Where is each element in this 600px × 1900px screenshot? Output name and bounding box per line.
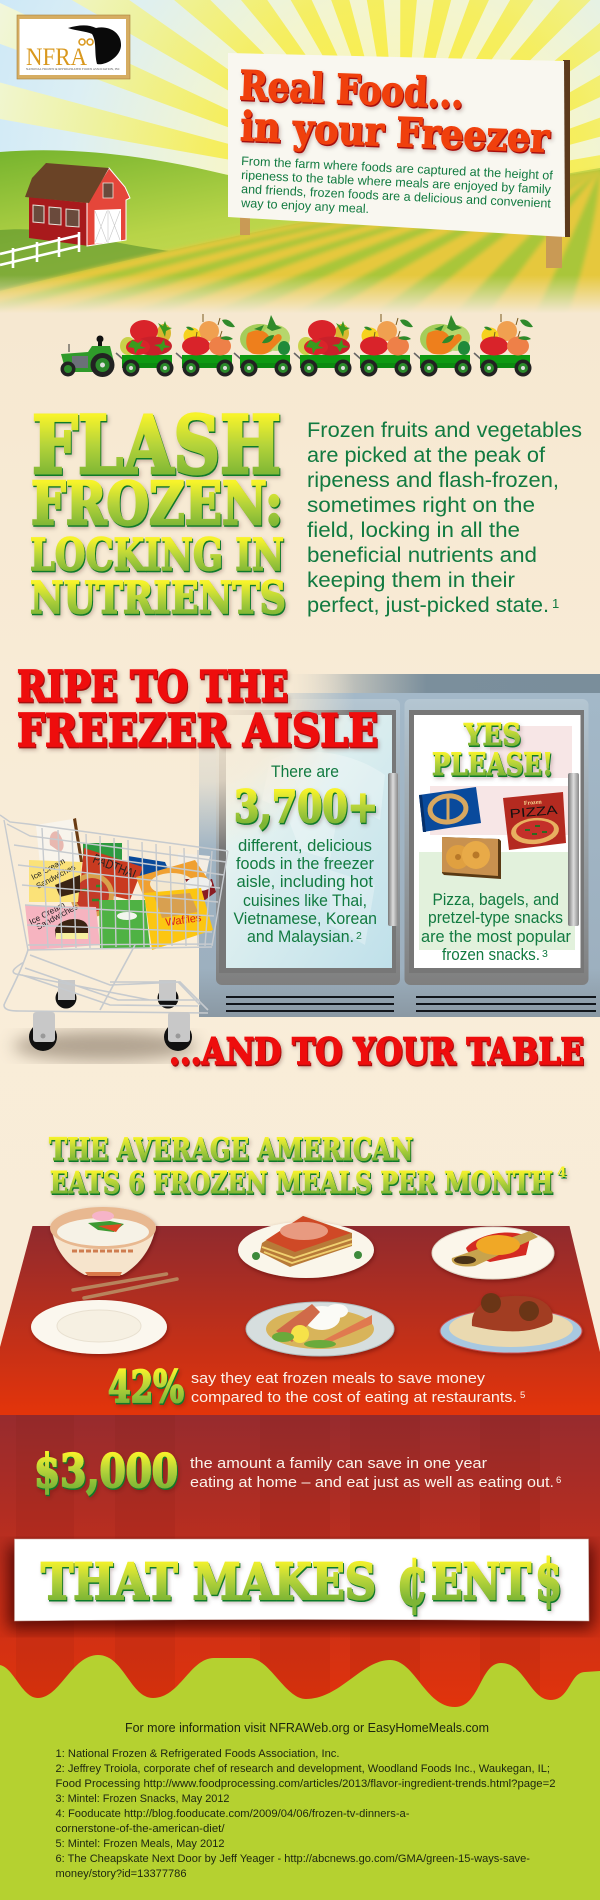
text: flash frozen explanation: perfect, just-picked state.: [307, 594, 549, 617]
text: flash frozen explanation: are picked at the peak of: [307, 444, 545, 467]
logo: [17, 15, 130, 79]
text: popular frozen snacks: frozen snacks.: [442, 946, 540, 964]
draped cloth folds: [16, 1415, 540, 1720]
text: flash frozen explanation: beneficial nutrients and: [307, 544, 537, 567]
crop field: [0, 170, 600, 307]
billboard headline: in your Freezer: [240, 103, 551, 162]
text: popular frozen snacks: Pizza, bagels, and: [432, 891, 559, 909]
green hill: [0, 150, 600, 291]
text: freezer aisle variety: cuisines like Thai,: [243, 892, 367, 910]
text: family savings: 6: [556, 1475, 561, 1486]
wagon: fruit: [354, 314, 413, 376]
heading: flash frozen: LOCKING IN: [30, 530, 284, 581]
heading: yes please: PLEASE!: [432, 747, 553, 783]
heading: ripe to the freezer aisle: [17, 662, 378, 757]
wagon: tomatoes: [294, 320, 352, 376]
freezer top band: [285, 674, 600, 693]
panel: savings background: [0, 1415, 600, 1720]
text: flash frozen explanation: Frozen fruits and vegetables: [307, 419, 582, 442]
fence: [0, 232, 80, 268]
freezer right door: [404, 699, 588, 985]
logo tagline: NATIONAL FROZEN & REFRIGERATED FOODS ASSOCIATION, INC: [26, 67, 120, 72]
banner headline: $: [535, 1547, 562, 1614]
front wheels: [29, 1012, 192, 1051]
billboard body text: From the farm where foods are captured at the height of: [241, 154, 554, 183]
stat: $3,000: $3,000: [34, 1444, 178, 1498]
text: flash frozen explanation: ripeness and flash-frozen,: [307, 469, 559, 492]
text: flash frozen explanation: 1: [552, 596, 559, 611]
banner sheet: [14, 1539, 589, 1621]
tractor: [60, 336, 114, 377]
text: references: money/story?id=13377786: [56, 1868, 186, 1880]
billboard body text: ripeness to the table where meals are enjoyed by family: [241, 168, 552, 197]
panel: freezer case: [190, 670, 600, 1017]
text: popular frozen snacks: [421, 891, 571, 964]
text: flash frozen explanation: field, locking in all the: [307, 519, 520, 542]
icon: bagel box: [442, 837, 501, 879]
barn: [25, 163, 130, 246]
wagon: fruit: [176, 314, 235, 376]
banner: that makes cents: [8, 1539, 594, 1629]
heading: average american frozen meals: [49, 1132, 567, 1201]
frozen foods in cart: Ice Cream: [27, 900, 67, 927]
plate: empty: [31, 1300, 167, 1354]
text: freezer aisle variety: and Malaysian.: [247, 928, 354, 946]
faded world map: [262, 752, 385, 945]
text: popular frozen snacks: are the most popular: [421, 928, 571, 946]
billboard body text: and friends, frozen foods are a delicious and convenient: [241, 182, 552, 211]
text: flash frozen explanation: [307, 419, 582, 617]
wagon: tomatoes: [116, 320, 174, 376]
stat: 42%: 42%: [108, 1362, 184, 1413]
text: save money: compared to the cost of eating at restaurants.: [191, 1390, 517, 1406]
frozen foods in cart: Waffles: [165, 912, 203, 929]
plate: noodle bowl: [50, 1207, 156, 1276]
banner headline: [41, 1541, 562, 1621]
frozen foods in cart: [25, 818, 216, 950]
heading: average american frozen meals: 4: [557, 1165, 567, 1181]
cart shadow: [13, 1031, 197, 1061]
chopsticks: [73, 1274, 177, 1298]
text: popular frozen snacks: 3: [542, 948, 548, 960]
freezer body: [199, 693, 600, 1017]
banner shadow: [8, 1545, 594, 1629]
text: references: Food Processing http://www.foodprocessing.com/articles/2013/flavor-ingredient-trends.html?page=2: [56, 1778, 556, 1790]
billboard body text: [240, 154, 554, 216]
heading: flash frozen: FROZEN:: [31, 469, 283, 538]
icon: pretzel box: [419, 787, 481, 832]
logo wordmark: NFRA: [26, 44, 87, 71]
banner headline: ENT: [431, 1552, 531, 1611]
text: references: 4: Fooducate http://blog.fooducate.com/2009/04/06/frozen-tv-dinners-a-: [56, 1808, 410, 1820]
text: save money: say they eat frozen meals to save money: [191, 1371, 486, 1387]
text: references: 3: Mintel: Frozen Snacks, May 2012: [56, 1793, 230, 1805]
text: references: cornerstone-of-the-american-diet/: [56, 1823, 225, 1835]
wagon: vegetables: [234, 315, 292, 376]
tractor pulling produce wagons: [60, 314, 533, 377]
text: flash frozen explanation: keeping them in their: [307, 569, 515, 592]
text: save money: 5: [520, 1390, 525, 1401]
text: more information: For more information visit NFRAWeb.org or EasyHomeMeals.com: [125, 1720, 489, 1735]
text: there are: There are: [271, 763, 339, 781]
billboard: [228, 53, 570, 268]
icon: pizza box: PIZZA: [509, 803, 559, 821]
sky: [0, 0, 600, 174]
stat: 3,700+: 3,700+: [234, 782, 378, 833]
back wheels: [56, 980, 178, 1008]
green dripping footer: [0, 1655, 600, 1900]
penguin mark: [68, 25, 121, 64]
penguin fish: [79, 39, 93, 45]
heading: ripe to the freezer aisle: RIPE TO THE: [17, 662, 288, 711]
text: references: [56, 1748, 556, 1880]
sun rays: [0, 0, 600, 175]
icon: pizza box: Frozen: [524, 799, 543, 807]
text: family savings: the amount a family can save in one year: [190, 1456, 487, 1472]
text: freezer aisle variety: different, delicious: [238, 837, 372, 855]
billboard body text: way to enjoy any meal.: [240, 196, 369, 216]
frozen foods in cart: Sandwiches: [34, 901, 79, 932]
frozen foods in cart: Ice Cream: [30, 856, 67, 882]
billboard headline: [240, 69, 555, 158]
heading: yes please: [432, 718, 553, 783]
text: references: 2: Jeffrey Troiola, corporate chef of research and development, Woodland Foods Inc., Waukegan, IL;: [56, 1763, 550, 1775]
frozen foods in cart: PADTHAI: [91, 851, 138, 882]
text: freezer aisle variety: Vietnamese, Korean: [234, 910, 377, 928]
plate: enchilada: [432, 1227, 554, 1279]
heading: flash frozen: [30, 398, 286, 624]
faded frozen boxes: [430, 726, 572, 835]
text: family savings: eating at home – and eat just as well as eating out.: [190, 1475, 554, 1491]
cart wire basket: [0, 815, 228, 950]
text: family savings: [190, 1456, 561, 1491]
text: references: 1: National Frozen & Refrigerated Foods Association, Inc.: [56, 1748, 340, 1760]
text: freezer aisle variety: [234, 837, 377, 946]
shopping cart: [0, 815, 228, 1061]
wagon: vegetables: [414, 315, 472, 376]
icon: pizza box: [503, 792, 566, 850]
text: references: 5: Mintel: Frozen Meals, May 2012: [56, 1838, 225, 1850]
frozen foods in cart: Sandwiches: [35, 863, 77, 891]
panel: farm header scene: [0, 0, 600, 312]
hill shadow: [0, 229, 169, 291]
freezer fade into parchment: [190, 670, 390, 850]
banner headline: THAT MAKES: [41, 1552, 376, 1611]
banner headline: ¢: [397, 1541, 428, 1621]
text: freezer aisle variety: foods in the freezer: [236, 855, 374, 873]
billboard posts: [240, 215, 562, 268]
billboard headline: Real Food...: [239, 62, 464, 118]
heading: yes please: YES: [463, 718, 521, 753]
freezer left door: [216, 699, 400, 985]
text: popular frozen snacks: pretzel-type snacks: [428, 909, 563, 927]
text: freezer aisle variety: 2: [356, 930, 362, 942]
text: references: 6: The Cheapskate Next Door by Jeff Yeager - http://abcnews.go.com/GMA/green-15-ways-save-: [56, 1853, 530, 1865]
heading: flash frozen: FLASH: [32, 398, 281, 492]
plate: spaghetti and meatballs: [440, 1293, 582, 1353]
plate: salmon and rice: [246, 1302, 394, 1356]
panel: red table: [0, 1226, 600, 1416]
text: save money: [191, 1371, 525, 1406]
text: flash frozen explanation: sometimes right on the: [307, 494, 535, 517]
text: freezer aisle variety: aisle, including hot: [236, 873, 373, 891]
heading: ripe to the freezer aisle: FREEZER AISLE: [17, 704, 378, 757]
heading: flash frozen: NUTRIENTS: [30, 573, 286, 624]
fade into parchment: [0, 275, 600, 320]
heading: average american frozen meals: THE AVERAGE AMERICAN: [49, 1132, 413, 1168]
plate: lasagna: [238, 1216, 374, 1278]
freezer vents: [226, 997, 596, 1011]
cart undercarriage: [4, 945, 208, 1013]
wagon: fruit: [474, 314, 533, 376]
faded frozen bags: [419, 852, 575, 950]
